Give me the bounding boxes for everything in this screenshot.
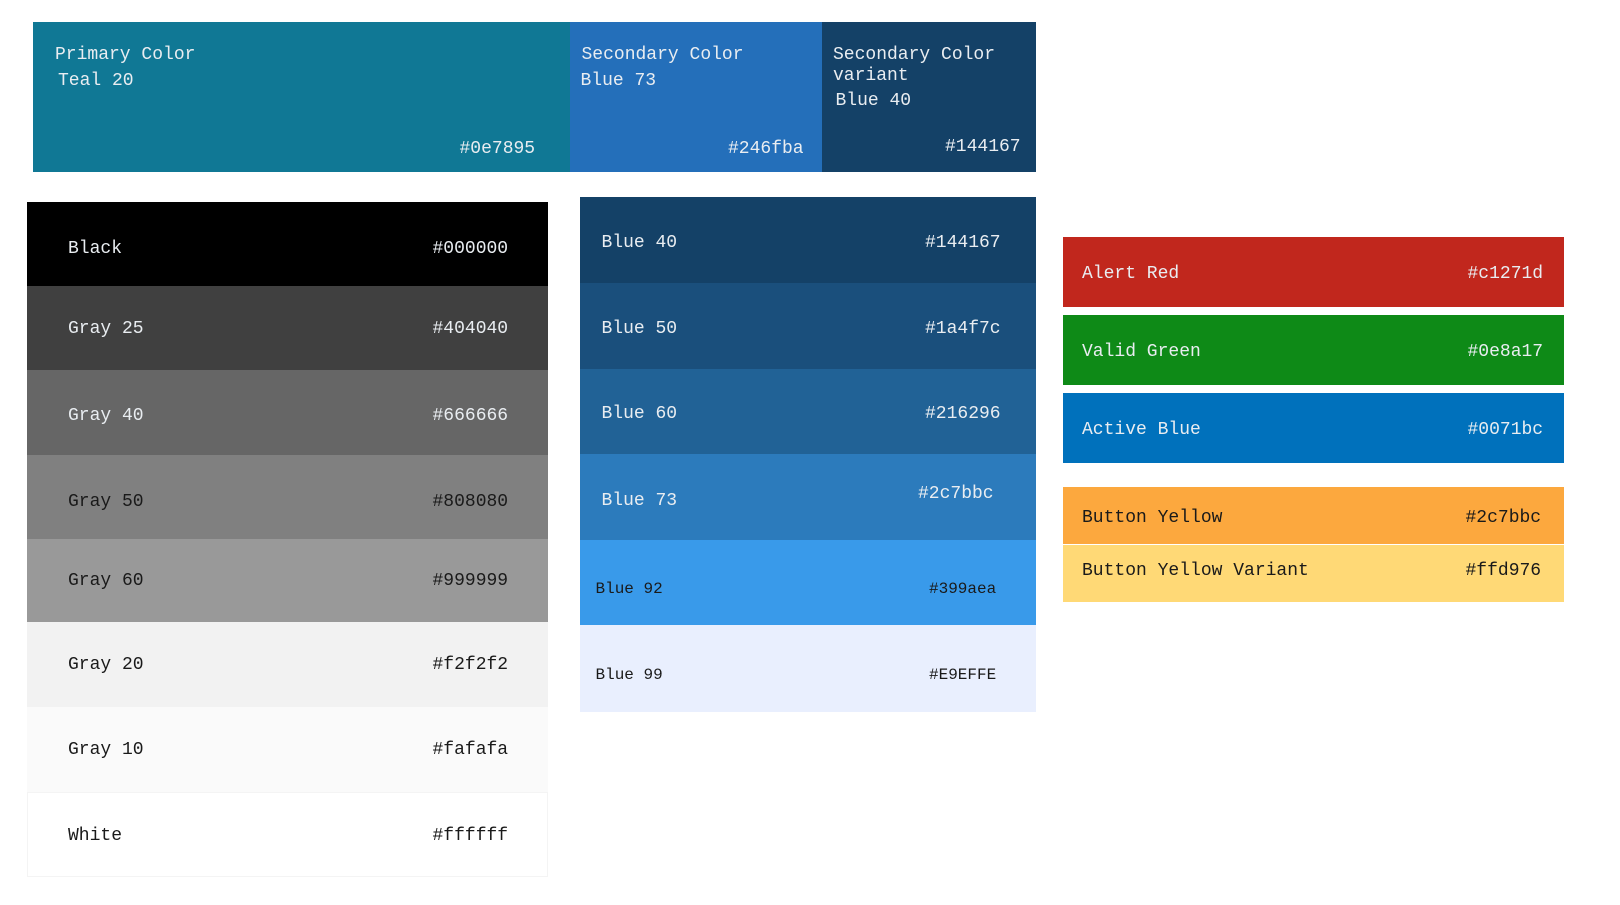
swatch: gray 40: Gray 40: [68, 406, 144, 426]
swatch: gray 50: #808080: [432, 492, 508, 512]
swatch: active blue: #0071bc: [1468, 420, 1543, 440]
swatch: valid green: #0e8a17: [1468, 342, 1543, 362]
swatch: gray 20: [27, 622, 548, 706]
swatch: white: [27, 792, 548, 877]
swatch: white: #ffffff: [432, 826, 508, 846]
swatch: gray 50: [27, 454, 548, 538]
swatch: black: [27, 202, 548, 286]
swatch: blue 50: #1a4f7c: [925, 319, 1001, 339]
swatch: secondary color blue 73: Blue 73: [580, 71, 656, 91]
swatch: gray 60: [27, 538, 548, 622]
swatch: gray 10: #fafafa: [432, 740, 508, 760]
swatch: black: #000000: [432, 239, 508, 259]
swatch: gray 60: Gray 60: [68, 571, 144, 591]
swatch: blue 40: Blue 40: [602, 233, 677, 253]
swatch: gray 40: [27, 370, 548, 454]
swatch: blue 60: [580, 368, 1036, 454]
swatch: blue 92: Blue 92: [596, 580, 663, 598]
swatch: gray 20: #f2f2f2: [432, 654, 508, 674]
swatch: secondary color variant blue 40: Secondary Color: [833, 45, 995, 65]
swatch: blue 92: #399aea: [929, 580, 996, 598]
swatch: alert red: #c1271d: [1468, 264, 1543, 284]
swatch: button yellow variant: #ffd976: [1466, 560, 1541, 580]
swatch: valid green: [1063, 315, 1564, 385]
swatch: alert red: [1063, 237, 1564, 307]
swatch: white: White: [68, 826, 122, 846]
swatch: blue 99: #E9EFFE: [929, 666, 996, 684]
swatch: button yellow: #2c7bbc: [1466, 508, 1541, 528]
swatch: gray 60: #999999: [432, 571, 508, 591]
swatch: alert red: Alert Red: [1082, 264, 1179, 284]
swatch: primary color teal 20: Teal 20: [58, 71, 134, 91]
swatch: valid green: Valid Green: [1082, 342, 1201, 362]
swatch: secondary color variant blue 40: Blue 40: [836, 91, 911, 111]
swatch: primary color teal 20: [33, 22, 570, 172]
swatch: secondary color variant blue 40: variant: [833, 66, 909, 86]
swatch: gray 25: [27, 286, 548, 370]
swatch: gray 20: Gray 20: [68, 654, 144, 674]
swatch: primary color teal 20: Primary Color: [55, 45, 195, 65]
swatch: blue 99: Blue 99: [596, 666, 663, 684]
swatch: button yellow: [1063, 487, 1564, 544]
swatch: gray 25: Gray 25: [68, 319, 144, 339]
swatch: gray 40: #666666: [432, 406, 508, 426]
swatch: active blue: Active Blue: [1082, 420, 1201, 440]
swatch: secondary color blue 73: [570, 22, 822, 172]
swatch: blue 60: Blue 60: [602, 404, 677, 424]
swatch: blue 99: [580, 625, 1036, 712]
swatch: blue 73: [580, 454, 1036, 540]
swatch: gray 10: [27, 706, 548, 792]
swatch: active blue: [1063, 393, 1564, 463]
swatch: secondary color variant blue 40: [822, 22, 1036, 172]
panel: status and button colors: [1063, 237, 1564, 602]
swatch: blue 73: Blue 73: [602, 490, 677, 510]
panel: blue scale colors: [580, 197, 1036, 712]
swatch: gray 50: Gray 50: [68, 492, 144, 512]
swatch: blue 50: Blue 50: [602, 319, 677, 339]
swatch: secondary color variant blue 40: #144167: [945, 137, 1021, 157]
swatch: blue 40: [580, 197, 1036, 283]
swatch: blue 92: [580, 540, 1036, 625]
swatch: button yellow variant: [1063, 545, 1564, 602]
swatch: gray 25: #404040: [432, 319, 508, 339]
panel: primary and secondary colors: [33, 22, 1036, 172]
panel: grayscale colors: [27, 202, 548, 877]
swatch: blue 40: #144167: [925, 233, 1001, 253]
swatch: primary color teal 20: #0e7895: [460, 139, 535, 159]
swatch: secondary color blue 73: Secondary Color: [582, 45, 744, 65]
swatch: blue 50: [580, 283, 1036, 368]
swatch: button yellow variant: Button Yellow Variant: [1082, 560, 1309, 580]
swatch: blue 60: #216296: [925, 404, 1001, 424]
swatch: gray 10: Gray 10: [68, 740, 144, 760]
swatch: blue 73: #2c7bbc: [918, 484, 994, 504]
swatch: button yellow: Button Yellow: [1082, 508, 1222, 528]
swatch: black: Black: [68, 239, 122, 259]
swatch: secondary color blue 73: #246fba: [728, 139, 804, 159]
